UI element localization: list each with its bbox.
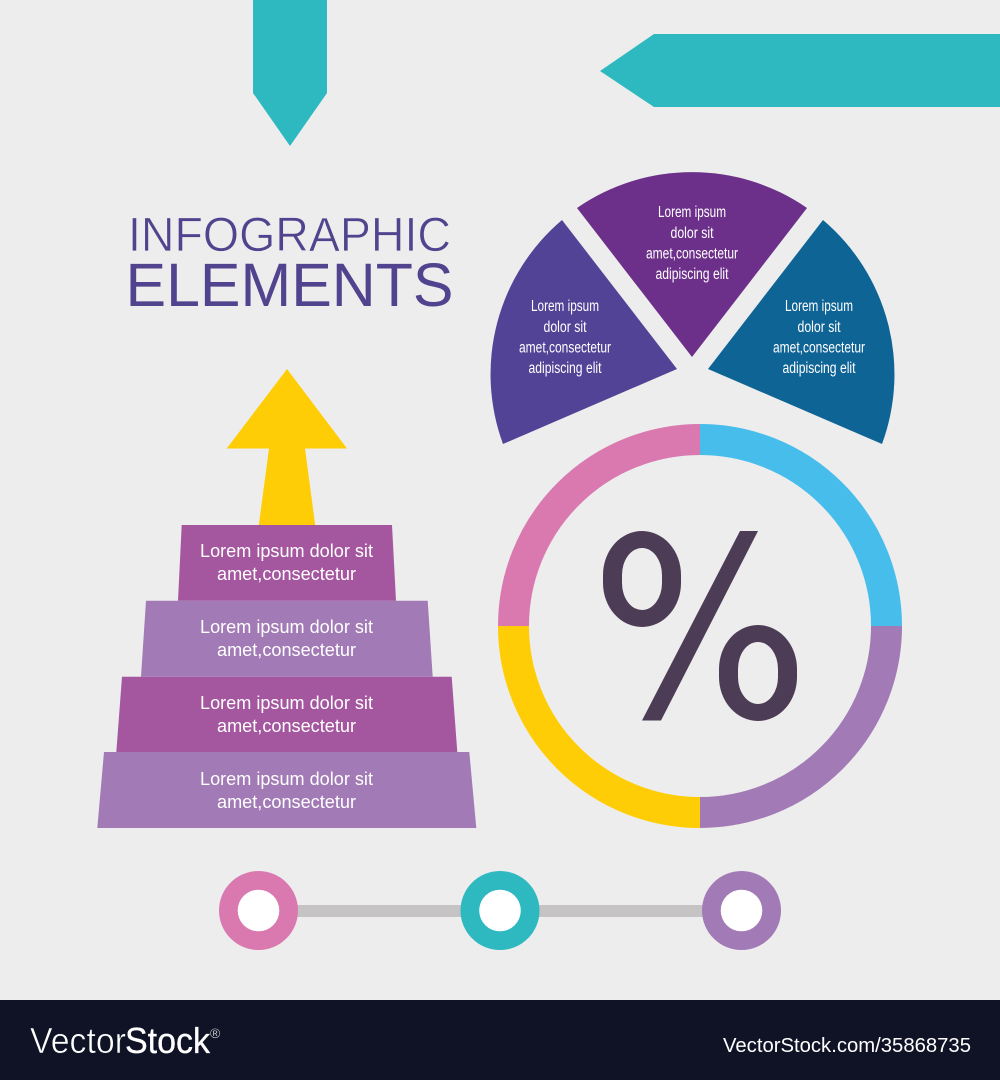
- chart: pyramid: [97, 525, 476, 828]
- pyramid step 1: Lorem ipsum dolor sit: [200, 541, 373, 561]
- pyramid step 2: Lorem ipsum dolor sit: [200, 617, 373, 637]
- pyramid step 4: amet,consectetur: [217, 792, 356, 812]
- pyramid step 1: amet,consectetur: [217, 564, 356, 584]
- footer bar: ®: [210, 1025, 221, 1041]
- pyramid step 3: Lorem ipsum dolor sit: [200, 693, 373, 713]
- title: INFOGRAPHIC: [128, 209, 451, 262]
- arrow: yellow up arrow: [227, 369, 347, 526]
- pyramid step 3: [116, 677, 457, 752]
- panel: pie segment left: dolor sit: [544, 319, 587, 336]
- timeline: [219, 871, 781, 950]
- icon: percent sign: [603, 531, 797, 721]
- panel: pie segment right: adipiscing elit: [782, 360, 856, 377]
- footer bar: [0, 1000, 1000, 1080]
- panel: pie segment top: adipiscing elit: [656, 266, 729, 283]
- panel: pie segment left: adipiscing elit: [528, 360, 602, 377]
- panel: pie segment right: amet,consectetur: [773, 340, 865, 356]
- node teal: [460, 871, 540, 950]
- arrow: teal left banner: [600, 34, 1000, 107]
- pyramid step 3: amet,consectetur: [217, 716, 356, 736]
- panel: pie segment top: dolor sit: [670, 225, 714, 242]
- pyramid step 4: [97, 752, 476, 828]
- node pink: [219, 871, 298, 950]
- footer bar: VectorStock.com/35868735: [723, 1035, 971, 1057]
- title: [126, 209, 454, 319]
- pyramid step 2: amet,consectetur: [217, 640, 356, 660]
- pyramid step 2: [141, 601, 433, 677]
- chart: percent donut ring: [514, 440, 886, 812]
- panel: pie segment right: dolor sit: [798, 319, 841, 336]
- footer bar: Vector: [30, 1020, 126, 1061]
- pyramid step 1: [178, 525, 396, 601]
- panel: pie segment left: [491, 220, 677, 444]
- panel: pie segment top: [577, 172, 807, 357]
- arrow: teal down banner: [253, 0, 327, 146]
- title: ELEMENTS: [126, 251, 454, 319]
- panel: pie segment left: Lorem ipsum: [531, 298, 599, 315]
- panel: pie segment top: Lorem ipsum: [658, 204, 726, 221]
- footer bar: Stock: [125, 1020, 211, 1061]
- panel: pie segment right: [708, 220, 894, 444]
- panel: pie segment right: Lorem ipsum: [785, 298, 853, 315]
- node purple: [702, 871, 781, 950]
- panel: pie segment left: amet,consectetur: [519, 340, 611, 356]
- pyramid step 4: Lorem ipsum dolor sit: [200, 769, 373, 789]
- panel: pie segment top: amet,consectetur: [646, 246, 738, 262]
